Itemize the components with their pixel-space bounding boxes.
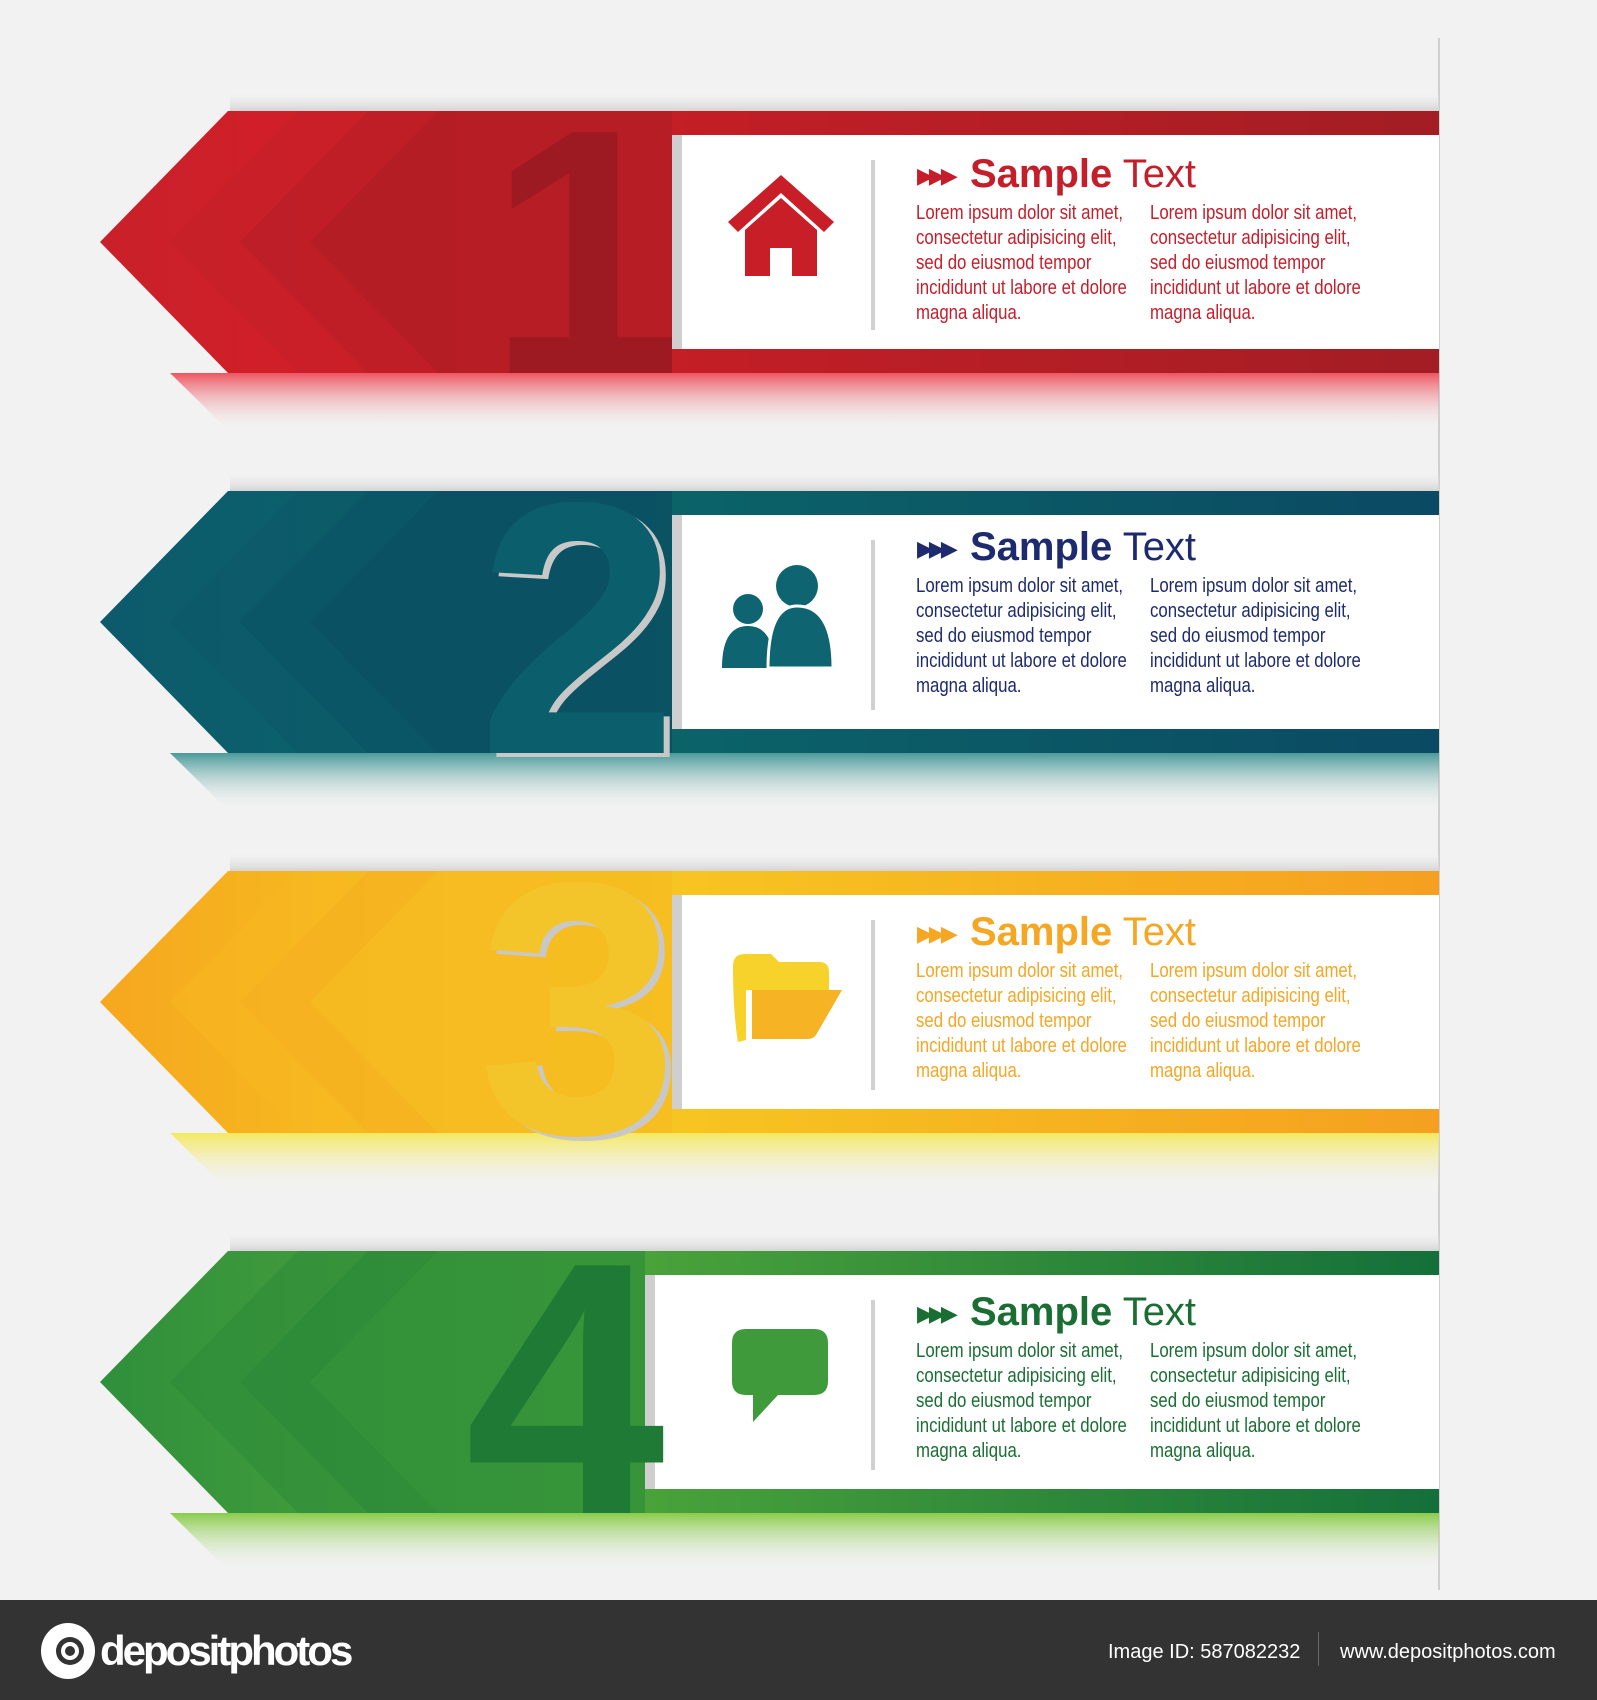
footer logo — [41, 1623, 352, 1679]
text block 2: incididunt ut labore et dolore — [916, 649, 1127, 671]
text block 3: sed do eiusmod tempor — [916, 1009, 1091, 1031]
text block 1: ▶▶▶ — [917, 163, 958, 188]
text block 3: Lorem ipsum dolor sit amet, — [916, 959, 1123, 981]
text block 1: incididunt ut labore et dolore — [1150, 276, 1361, 298]
text block 4: ▶▶▶ — [917, 1301, 958, 1326]
text block 2: Lorem ipsum dolor sit amet, — [916, 574, 1123, 596]
text block 3: Sample Text — [970, 910, 1196, 954]
text block 1 — [916, 152, 1361, 323]
text block 1: Lorem ipsum dolor sit amet, — [1150, 201, 1357, 223]
text block 1: magna aliqua. — [1150, 301, 1255, 323]
footer bar — [0, 1600, 1597, 1700]
text block 1: incididunt ut labore et dolore — [916, 276, 1127, 298]
footer info: www.depositphotos.com — [1339, 1641, 1556, 1663]
banner 4 green — [100, 1188, 1439, 1590]
text block 2: Sample Text — [970, 525, 1196, 569]
number 1: 1 — [488, 57, 682, 448]
icon: house — [728, 175, 834, 276]
text block 3: consectetur adipisicing elit, — [916, 984, 1117, 1006]
text block 2: sed do eiusmod tempor — [916, 624, 1091, 646]
number 2: 2 — [484, 432, 684, 834]
text block 4: incididunt ut labore et dolore — [1150, 1414, 1361, 1436]
text block 2: magna aliqua. — [1150, 674, 1255, 696]
text block 2: magna aliqua. — [916, 674, 1021, 696]
footer info: Image ID: 587082232 — [1108, 1641, 1300, 1663]
footer logo: depositphotos — [100, 1627, 352, 1674]
text block 4 — [916, 1290, 1361, 1461]
text block 2: Lorem ipsum dolor sit amet, — [1150, 574, 1357, 596]
text block 1: consectetur adipisicing elit, — [916, 226, 1117, 248]
text block 3: magna aliqua. — [1150, 1059, 1255, 1081]
text block 2: sed do eiusmod tempor — [1150, 624, 1325, 646]
text block 1: Lorem ipsum dolor sit amet, — [916, 201, 1123, 223]
text block 3 — [916, 910, 1361, 1081]
banner 2 teal — [100, 428, 1439, 834]
text block 1: consectetur adipisicing elit, — [1150, 226, 1351, 248]
banner 3 yellow: 3 — [478, 808, 678, 1210]
text block 4: magna aliqua. — [916, 1439, 1021, 1461]
text block 2 — [916, 525, 1361, 696]
text block 3: incididunt ut labore et dolore — [916, 1034, 1127, 1056]
text block 1: Sample Text — [970, 152, 1196, 196]
text block 2: consectetur adipisicing elit, — [1150, 599, 1351, 621]
text block 4: sed do eiusmod tempor — [916, 1389, 1091, 1411]
text block 3: ▶▶▶ — [917, 921, 958, 946]
text block 4: incididunt ut labore et dolore — [916, 1414, 1127, 1436]
text block 2: consectetur adipisicing elit, — [916, 599, 1117, 621]
text block 2: incididunt ut labore et dolore — [1150, 649, 1361, 671]
text block 1: sed do eiusmod tempor — [916, 251, 1091, 273]
banner 3 yellow — [100, 808, 1439, 1214]
icon: people — [722, 565, 833, 668]
text block 3: magna aliqua. — [916, 1059, 1021, 1081]
text block 4: sed do eiusmod tempor — [1150, 1389, 1325, 1411]
text block 1: sed do eiusmod tempor — [1150, 251, 1325, 273]
text block 3: consectetur adipisicing elit, — [1150, 984, 1351, 1006]
text block 4: Lorem ipsum dolor sit amet, — [1150, 1339, 1357, 1361]
number 3: 3 — [484, 812, 684, 1214]
text block 2: ▶▶▶ — [917, 536, 958, 561]
text block 3: sed do eiusmod tempor — [1150, 1009, 1325, 1031]
number 4: 4 — [465, 1188, 667, 1590]
text block 3: Lorem ipsum dolor sit amet, — [1150, 959, 1357, 981]
text block 4: Sample Text — [970, 1290, 1196, 1334]
text block 3: incididunt ut labore et dolore — [1150, 1034, 1361, 1056]
icon: folder — [733, 954, 842, 1042]
text block 4: consectetur adipisicing elit, — [1150, 1364, 1351, 1386]
icon: speech bubble — [732, 1329, 828, 1422]
text block 4: consectetur adipisicing elit, — [916, 1364, 1117, 1386]
banner 2 teal: 2 — [478, 428, 678, 830]
text block 4: magna aliqua. — [1150, 1439, 1255, 1461]
footer info — [1108, 1632, 1556, 1666]
banner 1 red — [100, 57, 1439, 448]
text block 1: magna aliqua. — [916, 301, 1021, 323]
text block 4: Lorem ipsum dolor sit amet, — [916, 1339, 1123, 1361]
